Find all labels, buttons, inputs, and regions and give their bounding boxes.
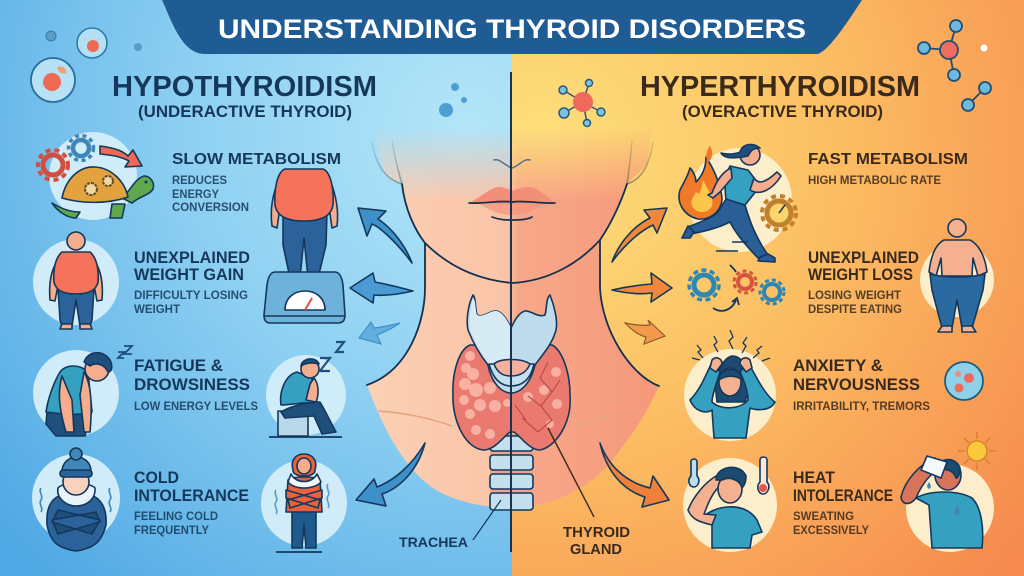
text: fast metabolism: HIGH METABOLIC RATE [808, 173, 941, 187]
heading: hyperthyroidism: (OVERACTIVE THYROID) [682, 103, 883, 121]
icon: running woman with flame and gear [679, 145, 796, 262]
text: cold intolerance: INTOLERANCE [134, 486, 249, 505]
text: unexplained weight loss: DESPITE EATING [808, 302, 902, 316]
text: slow metabolism: CONVERSION [172, 200, 249, 214]
icon: turtle with gears [38, 132, 153, 220]
panel: fatigue and drowsiness [33, 342, 346, 437]
text: unexplained weight loss: WEIGHT LOSS [808, 265, 913, 284]
arrow: up-right orange [612, 208, 667, 262]
text: heat intolerance: SWEATING [793, 509, 854, 523]
heading: hyperthyroidism [640, 71, 920, 121]
text: fatigue and drowsiness: FATIGUE & [134, 356, 223, 375]
arrow: down-left light blue [359, 322, 400, 344]
arrow: up-left blue [358, 208, 412, 263]
title banner: UNDERSTANDING THYROID DISORDERS [218, 14, 806, 44]
text: fatigue and drowsiness: LOW ENERGY LEVELS [134, 399, 258, 413]
text: unexplained weight gain [134, 248, 250, 316]
icon: person in orange jacket [261, 454, 347, 552]
text: heat intolerance: EXCESSIVELY [793, 523, 869, 537]
text: cold intolerance: FREQUENTLY [134, 523, 209, 537]
label: trachea: TRACHEA [399, 534, 468, 550]
icon: hot person with thermometers [683, 457, 777, 552]
text: fast metabolism [808, 151, 968, 187]
label: trachea [399, 500, 501, 550]
background: right orange half [512, 0, 1024, 576]
heading: hyperthyroidism: HYPERTHYROIDISM [640, 71, 920, 103]
text: anxiety and nervousness: ANXIETY & [793, 356, 883, 375]
text: unexplained weight gain: UNEXPLAINED [134, 248, 250, 267]
icon: cell circle [945, 362, 983, 400]
arrow: down-left blue [356, 443, 425, 506]
text: fatigue and drowsiness: DROWSINESS [134, 375, 250, 394]
text: anxiety and nervousness: NERVOUSNESS [793, 375, 920, 394]
arrow: left blue [350, 273, 413, 303]
icon: tired person sitting [266, 342, 346, 437]
icon: molecule center [559, 80, 605, 126]
decoration: blue bubbles [439, 83, 467, 117]
panel: fast metabolism [679, 145, 968, 262]
icon: person in winter hat and coat [32, 448, 120, 551]
text: slow metabolism: REDUCES [172, 173, 227, 187]
panel: heat intolerance [683, 432, 996, 552]
text: heat intolerance [793, 468, 893, 537]
text: fast metabolism: FAST METABOLISM [808, 151, 968, 168]
background: left blue half [0, 0, 512, 576]
heading: hypothyroidism: HYPOTHYROIDISM [112, 71, 377, 103]
text: heat intolerance: INTOLERANCE [793, 486, 893, 505]
text: slow metabolism: SLOW METABOLISM [172, 151, 341, 168]
text: cold intolerance: FEELING COLD [134, 509, 218, 523]
heading: hypothyroidism [112, 71, 377, 121]
text: unexplained weight loss: LOSING WEIGHT [808, 288, 902, 302]
title banner [162, 0, 862, 54]
icon: sweating man with sun [901, 432, 996, 552]
illustration: thyroid cartilage [467, 295, 557, 393]
icon: anxious woman holding head [684, 330, 776, 441]
icon: person on scale [264, 169, 345, 323]
center divider line [510, 72, 512, 552]
panel: cold intolerance [32, 448, 347, 552]
icon: tired person bending [33, 346, 132, 436]
arrow: right orange [612, 273, 672, 302]
text: slow metabolism: ENERGY [172, 187, 219, 201]
icons: floating cells [31, 28, 142, 102]
icon: molecules top right [918, 20, 991, 111]
label: thyroid gland: GLAND [570, 541, 622, 558]
label: thyroid gland: THYROID [563, 524, 630, 541]
heading: hypothyroidism: (UNDERACTIVE THYROID) [138, 103, 352, 121]
text: anxiety and nervousness [793, 356, 930, 413]
panel: slow metabolism [38, 132, 341, 220]
illustration: thyroid gland lobes [453, 345, 570, 450]
text: anxiety and nervousness: IRRITABILITY, TREMORS [793, 399, 930, 413]
arrow: down-right orange [600, 443, 669, 507]
text: fatigue and drowsiness [134, 356, 258, 413]
text: unexplained weight gain: WEIGHT [134, 302, 181, 316]
text: cold intolerance [134, 468, 249, 537]
illustration: trachea [490, 434, 533, 510]
text: cold intolerance: COLD [134, 468, 179, 487]
icon: row of gears [689, 265, 784, 311]
arrow: right small orange [625, 320, 665, 344]
icon: thin person with loose pants [920, 219, 994, 332]
illustration: face and neck [367, 125, 659, 508]
text: unexplained weight gain: WEIGHT GAIN [134, 265, 244, 284]
icon: overweight person [33, 232, 119, 329]
label: thyroid gland [548, 428, 630, 558]
text: unexplained weight loss [808, 248, 919, 316]
panel: anxiety and nervousness [684, 330, 983, 441]
text: slow metabolism [172, 151, 341, 214]
text: unexplained weight loss: UNEXPLAINED [808, 248, 919, 267]
text: unexplained weight gain: DIFFICULTY LOSING [134, 288, 248, 302]
panel: unexplained weight loss [808, 219, 994, 332]
panel: unexplained weight gain [33, 232, 250, 329]
text: heat intolerance: HEAT [793, 468, 836, 487]
